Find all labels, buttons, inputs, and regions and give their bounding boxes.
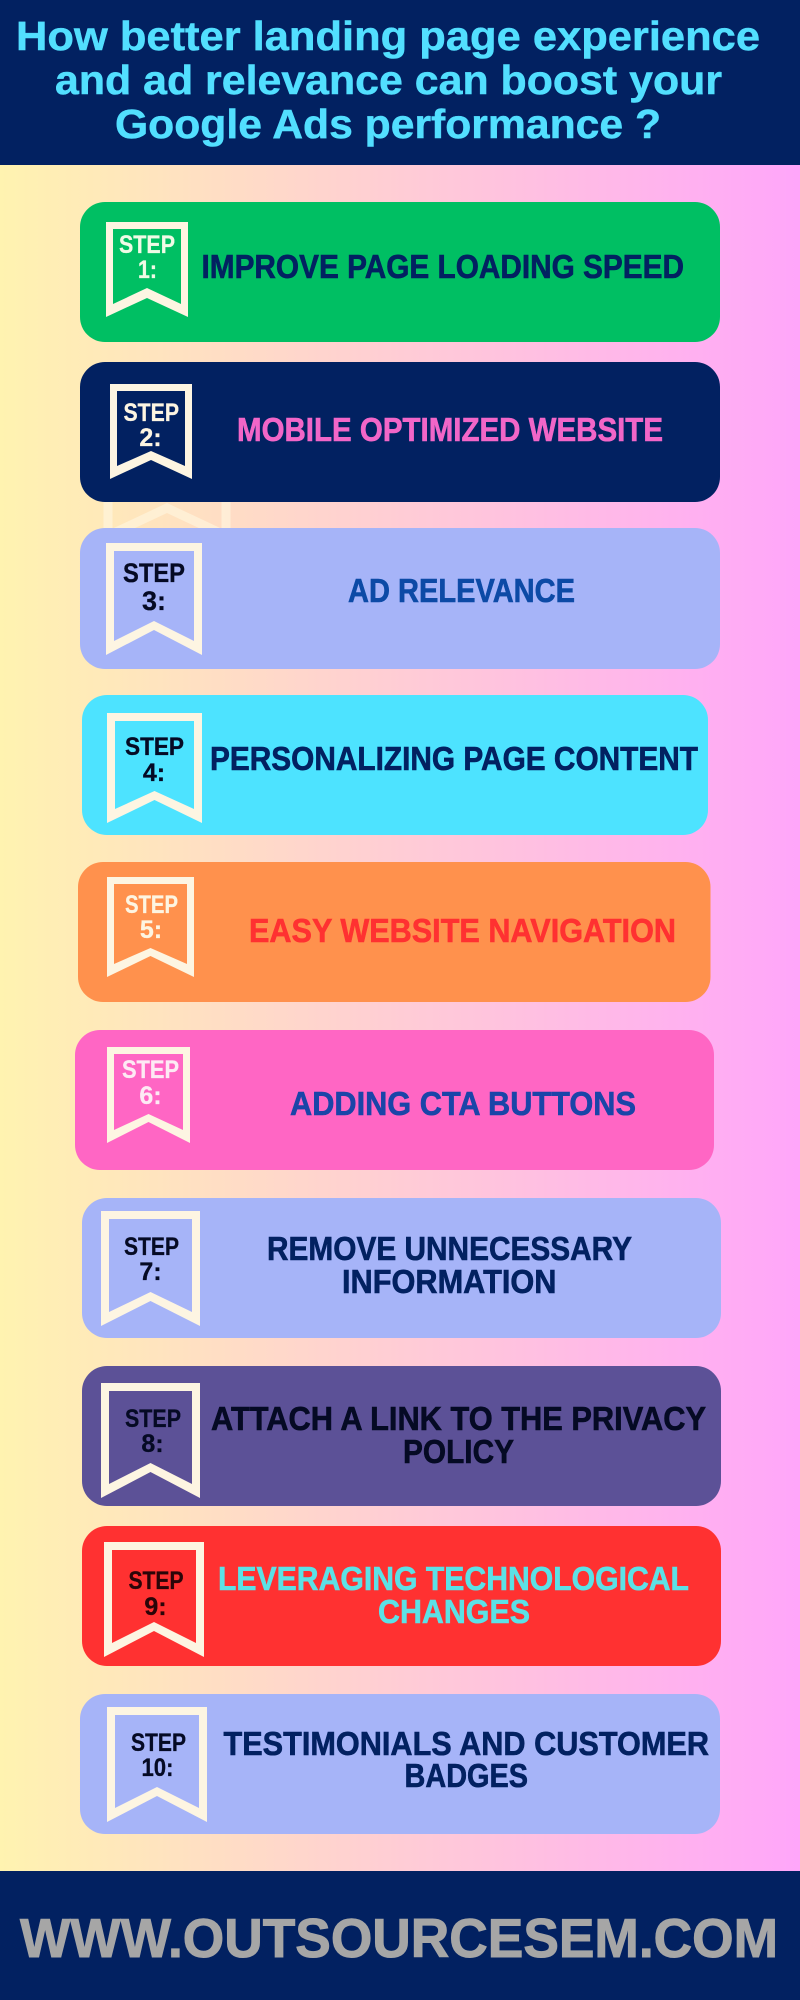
title: Google Ads performance ? xyxy=(115,101,661,147)
step label 3: 3: xyxy=(142,586,166,616)
step 9 heading xyxy=(218,1560,689,1630)
step label 10 xyxy=(131,1729,186,1782)
step 6 heading: ADDING CTA BUTTONS xyxy=(290,1085,636,1122)
step label 3 xyxy=(123,558,185,616)
icon: ribbon step 5 xyxy=(107,877,194,977)
step label 6 xyxy=(122,1056,179,1110)
step 8 heading xyxy=(211,1400,706,1470)
step label 8 xyxy=(125,1405,181,1458)
title: How better landing page experience xyxy=(16,13,760,59)
panel: step 8 xyxy=(82,1366,721,1506)
panel: step 7 xyxy=(82,1198,721,1338)
step label 10: STEP xyxy=(131,1729,186,1757)
panel: step 9 xyxy=(82,1526,721,1666)
panel: step 1 xyxy=(80,202,720,342)
step 7 heading: INFORMATION xyxy=(342,1263,556,1300)
step label 2: 2: xyxy=(139,424,162,452)
step label 6: STEP xyxy=(122,1056,179,1084)
step 10 heading: TESTIMONIALS AND CUSTOMER xyxy=(224,1725,709,1762)
step 8 heading: POLICY xyxy=(403,1433,514,1470)
icon: ribbon step 2 xyxy=(110,384,192,479)
step label 2: STEP xyxy=(124,399,179,427)
icon: ribbon step 3 xyxy=(106,543,202,655)
panel: step 5 xyxy=(78,862,710,1002)
step label 5 xyxy=(125,891,178,944)
step label 1: STEP xyxy=(119,231,175,259)
step label 2 xyxy=(124,399,179,452)
step label 9: 9: xyxy=(144,1593,167,1621)
website url: WWW.OUTSOURCESEM.COM xyxy=(20,1907,778,1969)
icon: ribbon step 9 xyxy=(104,1542,204,1657)
step label 6: 6: xyxy=(139,1082,162,1110)
step label 10: 10: xyxy=(142,1754,174,1782)
icon: ribbon step 8 xyxy=(101,1383,200,1498)
step label 7 xyxy=(124,1233,179,1286)
faded ribbon behind step 3 xyxy=(108,500,226,532)
step 7 heading: REMOVE UNNECESSARY xyxy=(267,1230,632,1267)
step label 4: 4: xyxy=(143,759,165,787)
step label 7: STEP xyxy=(124,1233,179,1261)
step label 1: 1: xyxy=(138,256,157,284)
step label 8: 8: xyxy=(141,1430,164,1458)
step 10 heading xyxy=(224,1725,709,1794)
panel: step 3 xyxy=(80,528,720,669)
step label 4: STEP xyxy=(125,733,184,761)
step 9 heading: LEVERAGING TECHNOLOGICAL xyxy=(218,1560,689,1597)
step 9 heading: CHANGES xyxy=(378,1593,530,1630)
step label 4 xyxy=(125,733,184,787)
step label 1 xyxy=(119,231,175,284)
icon: ribbon step 4 xyxy=(107,713,202,823)
step 1 heading: IMPROVE PAGE LOADING SPEED xyxy=(202,248,684,285)
step label 3: STEP xyxy=(123,558,185,588)
footer band with website xyxy=(0,1871,800,2000)
title xyxy=(16,13,760,147)
step 2 heading: MOBILE OPTIMIZED WEBSITE xyxy=(237,411,663,448)
header band with title xyxy=(0,0,800,165)
icon: ribbon step 7 xyxy=(101,1211,200,1326)
step label 5: 5: xyxy=(140,916,162,944)
step label 9 xyxy=(128,1567,184,1621)
icon: ribbon step 1 xyxy=(106,222,188,317)
step 8 heading: ATTACH A LINK TO THE PRIVACY xyxy=(211,1400,706,1437)
title: and ad relevance can boost your xyxy=(55,57,722,103)
step label 9: STEP xyxy=(128,1567,184,1595)
step label 5: STEP xyxy=(125,891,178,919)
step 10 heading: BADGES xyxy=(404,1757,528,1794)
step 7 heading xyxy=(267,1230,632,1300)
step label 8: STEP xyxy=(125,1405,181,1433)
panel: step 10 xyxy=(80,1694,720,1834)
step 3 heading: AD RELEVANCE xyxy=(348,572,575,609)
step 5 heading: EASY WEBSITE NAVIGATION xyxy=(249,912,676,949)
icon: ribbon step 10 xyxy=(107,1707,207,1822)
step 4 heading: PERSONALIZING PAGE CONTENT xyxy=(210,740,698,777)
step label 7: 7: xyxy=(139,1258,162,1286)
panel: step 2 xyxy=(80,362,720,502)
panel: step 4 xyxy=(82,695,708,835)
icon: ribbon step 6 xyxy=(107,1047,190,1143)
panel: step 6 xyxy=(75,1030,714,1170)
